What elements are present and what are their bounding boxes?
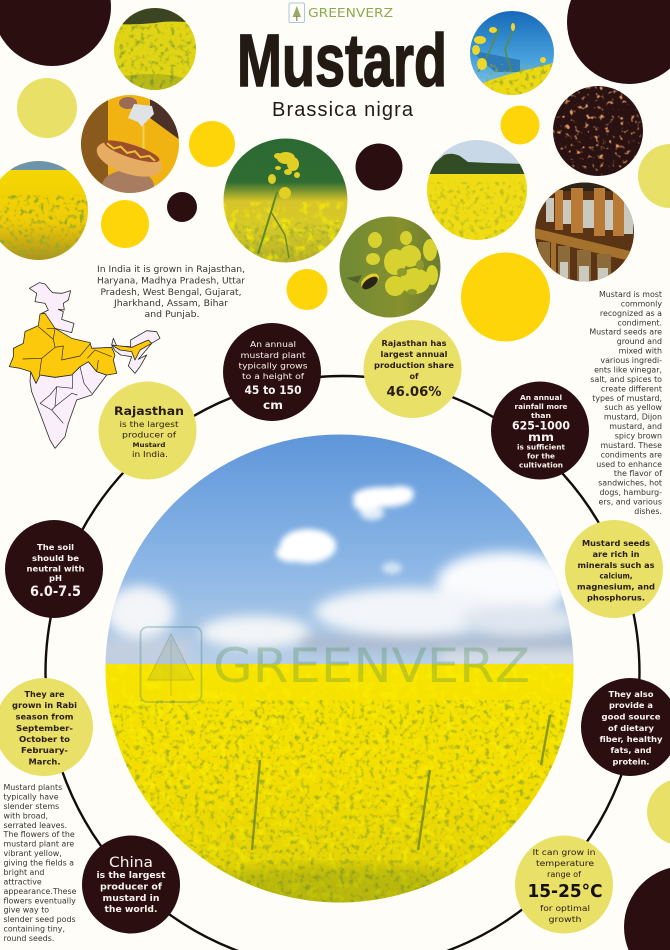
node: temperature: It can grow in [532, 847, 596, 857]
text block: plant description: give way to [4, 906, 49, 915]
text block: plant description: with broad, [4, 811, 48, 820]
photo: flowers against blue sky [470, 10, 556, 96]
decorative circle: pale yellow left [17, 78, 77, 138]
node: China largest producer: producer of [100, 882, 162, 892]
text block: plant description: flowers eventually [4, 896, 76, 905]
text block: mustard as a condiment: mustard, Dijon [604, 413, 662, 422]
node: plant height: 45 to 150 [244, 383, 302, 397]
text block: plant description: serrated leaves. [4, 821, 67, 830]
node: Rajasthan production share: production share [374, 360, 454, 370]
text block: mustard as a condiment: condiment. [617, 318, 662, 327]
photo: mustard field top [112, 8, 196, 90]
node: plant height: cm [263, 398, 283, 412]
node: fiber, fats and protein: fiber, healthy [600, 734, 663, 744]
decorative circle: yellow beside hot dog [189, 121, 235, 167]
photo: black mustard seeds [552, 85, 644, 177]
node: China largest producer: China [109, 855, 153, 871]
text block: plant description: appearance.These [4, 887, 77, 896]
node: plant height [223, 323, 321, 421]
text block: mustard as a condiment: such as yellow [604, 403, 663, 412]
map: India with producing states highlighted [9, 283, 160, 448]
text block: mustard as a condiment: dogs, hamburg- [600, 488, 662, 497]
node: Rajasthan largest producer: is the largest [120, 419, 179, 429]
node: rainfall: for the [527, 452, 555, 460]
subtitle: Brassica nigra [272, 99, 414, 121]
node: plant height: mustard plant [240, 350, 306, 360]
decorative circle: yellow lower left [101, 200, 149, 248]
node: temperature [515, 836, 613, 934]
node: minerals: Mustard seeds [582, 538, 650, 548]
text block: mustard as a condiment: dishes. [634, 507, 662, 516]
node: temperature: range of [547, 869, 582, 879]
node: soil pH: neutral with [26, 564, 85, 574]
text block: plant description: containing tiny, [4, 925, 65, 934]
node: plant height: An annual [250, 339, 296, 349]
text block: mustard as a condiment: ground and [617, 337, 662, 346]
main photo: mustard field under blue sky [100, 434, 580, 915]
node: rainfall [491, 382, 589, 480]
node: Rabi season: February- [21, 745, 68, 755]
node: Rajasthan production share [364, 320, 462, 418]
decorative circle: small dark [167, 192, 197, 222]
decorative circle: yellow upper right [500, 106, 540, 144]
decorative circle: dark bottom right [624, 866, 670, 950]
watermark: Greenverz logo: GREENVERZ [213, 639, 530, 694]
text block: where it is grown in India: In India it is grown in Rajasthan, [97, 265, 245, 275]
node: fiber, fats and protein: They also [608, 689, 654, 699]
node: soil pH: should be [32, 553, 79, 563]
node: rainfall: An annual [520, 393, 562, 402]
node: soil pH [5, 520, 103, 618]
node: rainfall: is sufficient [517, 442, 566, 452]
node: minerals: are rich in [592, 549, 640, 559]
node: Rajasthan production share: 46.06% [386, 384, 442, 400]
decorative circle: pale yellow lower right edge [647, 779, 670, 845]
text block: mustard as a condiment: mustard, and [609, 422, 662, 431]
text block: where it is grown in India: Haryana, Madhya Pradesh, Uttar [97, 276, 245, 286]
text block: mustard as a condiment: salt, and spices to [590, 375, 662, 384]
text block: mustard as a condiment [589, 290, 663, 516]
node: rainfall: mm [528, 430, 554, 444]
node: Rabi season: September- [16, 723, 73, 733]
text block: mustard as a condiment: recognized as a [600, 309, 662, 318]
node: soil pH: The soil [37, 542, 74, 552]
text block: mustard as a condiment: Mustard seeds are [589, 328, 662, 337]
node: minerals [565, 520, 663, 618]
node: fiber, fats and protein [581, 678, 670, 776]
node: minerals: magnesium, and [577, 582, 655, 592]
node: Rajasthan production share: largest annual [380, 349, 448, 359]
photo: mustard field left [0, 160, 90, 262]
node: plant height: to a height of [242, 371, 305, 381]
node: Rajasthan largest producer: Rajasthan [114, 404, 184, 418]
node: temperature: 15-25°C [528, 882, 602, 902]
text block: where it is grown in India: Jharkhand, Assam, Bihar [113, 299, 228, 309]
text block: mustard as a condiment: commonly [621, 299, 662, 308]
node: Rabi season: They are [24, 689, 65, 699]
node: Rabi season: grown in Rabi [12, 700, 77, 710]
node: minerals: minerals such as [578, 560, 655, 570]
text block: plant description: giving the fields a [4, 858, 74, 868]
text block: plant description [2, 783, 77, 943]
node: plant height: typically grows [238, 360, 308, 370]
text block: plant description: attractive [4, 877, 42, 886]
text block: where it is grown in India [97, 265, 245, 320]
decorative circle: large yellow [461, 252, 550, 342]
text block: mustard as a condiment: create different [601, 384, 662, 393]
node: Rabi season: October to [19, 734, 70, 744]
decorative circle: dark top left [0, 0, 111, 66]
node: China largest producer: is the largest [96, 871, 166, 881]
node: fiber, fats and protein: of dietary [608, 723, 655, 733]
watermark: Greenverz logo [140, 627, 530, 702]
node: rainfall: 625-1000 [512, 418, 570, 432]
node: Rajasthan largest producer: Mustard [132, 441, 166, 449]
text block: mustard as a condiment: ents like vinegar, [594, 366, 662, 374]
text block: mustard as a condiment: various ingredi- [600, 356, 662, 365]
text block: plant description: Mustard plants [4, 783, 62, 792]
text block: mustard as a condiment: Mustard is most [599, 290, 662, 299]
logo: Greenverz header: GREENVERZ [308, 5, 393, 20]
node: soil pH: 6.0-7.5 [30, 584, 81, 600]
text block: mustard as a condiment: sandwiches, hot [598, 479, 662, 488]
connecting ring [46, 376, 640, 950]
text block: plant description: mustard plant are [4, 840, 74, 849]
text block: plant description: slender stems [4, 802, 59, 811]
node: Rabi season: season from [16, 712, 74, 722]
node: fiber, fats and protein: fats, and [610, 745, 652, 755]
node: rainfall: rainfall more [514, 402, 568, 411]
text block: mustard as a condiment: mixed with [619, 347, 662, 356]
text block: mustard as a condiment: used to enhance [596, 460, 662, 469]
node: China largest producer: the world. [104, 905, 158, 915]
node: rainfall: cultivation [519, 460, 563, 470]
text block: plant description: round seeds. [4, 934, 54, 943]
text block: mustard as a condiment: ers, and various [599, 498, 662, 506]
node: Rabi season [0, 678, 93, 776]
decorative circle: dark top right [567, 0, 670, 84]
text block: plant description: typically have [4, 792, 59, 801]
node: minerals: calcium, [600, 570, 632, 580]
node: Rajasthan largest producer: in India. [132, 449, 168, 459]
node: Rajasthan largest producer: producer of [122, 430, 177, 440]
decorative circle: dark centre [356, 144, 402, 190]
logo: Greenverz header [289, 3, 393, 22]
decorative circle: yellow under plant [286, 269, 328, 310]
text block: plant description: vibrant yellow, [4, 849, 62, 858]
text block: mustard as a condiment: types of mustard, [592, 394, 662, 403]
text block: mustard as a condiment: the flavor of [614, 469, 662, 478]
node: Rajasthan largest producer [98, 382, 196, 480]
text block: plant description: slender seed pods [4, 915, 76, 924]
node: soil pH: pH [49, 573, 62, 583]
node: China largest producer: mustard in [102, 894, 160, 904]
photo: field with tree line [426, 140, 528, 242]
decorative circle: pale yellow right edge [638, 144, 670, 208]
node: Rabi season: March. [28, 756, 60, 766]
text block: mustard as a condiment: spicy brown [615, 432, 662, 440]
photo: mustard jars on wooden shelves [534, 181, 636, 284]
text block: plant description: bright and [4, 868, 44, 877]
node: rainfall: than [531, 411, 551, 420]
node: fiber, fats and protein: good source [602, 712, 661, 722]
text block: mustard as a condiment: condiments are [601, 450, 662, 459]
text block: where it is grown in India: and Punjab. [144, 310, 200, 320]
node: temperature: temperature [536, 858, 594, 868]
photo: bee on mustard flowers [338, 216, 442, 319]
node: Rajasthan production share: Rajasthan has [382, 338, 447, 348]
text block: plant description: The flowers of the [2, 830, 75, 839]
node: fiber, fats and protein: provide a [609, 700, 653, 710]
node: temperature: for optimal [540, 903, 590, 913]
node: temperature: growth [548, 914, 582, 924]
node: minerals: phosphorus. [587, 592, 645, 602]
text block: mustard as a condiment: mustard. These [600, 441, 662, 450]
title: Mustard [237, 19, 447, 102]
text block: where it is grown in India: Pradesh, West Bengal, Gujarat, [100, 288, 242, 298]
photo: mustard on a hot dog [81, 95, 179, 193]
node: Rajasthan production share: of [410, 371, 419, 381]
node: fiber, fats and protein: protein. [612, 756, 650, 766]
photo: mustard plant in flower [222, 138, 350, 264]
node: China largest producer [82, 836, 180, 934]
